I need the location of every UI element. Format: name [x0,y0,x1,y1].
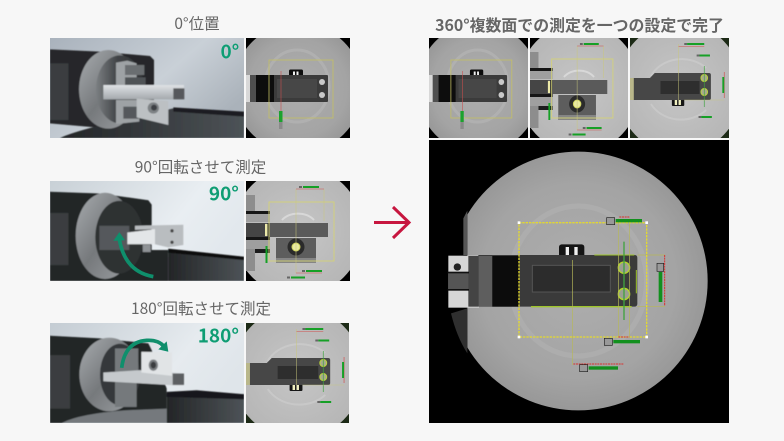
heading: 0 degree position: 0°位置 [174,12,220,34]
handles [518,221,648,338]
workpiece [448,244,637,308]
thumbnail: 180 degree result [630,38,729,138]
degree label: 180° [198,321,239,348]
heading: rotate 180 degrees and measure: 180°回転させて測定 [131,297,271,319]
degree label: 0° [220,38,239,65]
heading: rotate 90 degrees and measure: 90°回転させて測定 [135,156,266,178]
measurement labels [580,218,664,372]
photo: fixture at 0 degrees [50,38,244,138]
arrow: rotation [113,232,153,277]
heading: complete 360 degree measurement: 360°複数面での測定を一つの設定で完了 [435,13,724,36]
degree label: 90° [209,179,239,207]
microscope image: 0 degrees [246,38,350,138]
microscope image: 90 degrees [246,181,350,281]
photo: fixture at 90 degrees with rotation arrow [50,179,244,281]
arrow: result [374,207,409,238]
main microscope image with measurements [429,140,729,423]
thumbnail: 0 degree result [429,38,528,138]
photo: fixture at 180 degrees with rotation arrow [50,321,244,423]
measurement guides [519,217,665,365]
microscope image: 180 degrees [246,323,349,423]
arrow: rotation [122,340,168,368]
thumbnail: 90 degree result [530,38,628,138]
